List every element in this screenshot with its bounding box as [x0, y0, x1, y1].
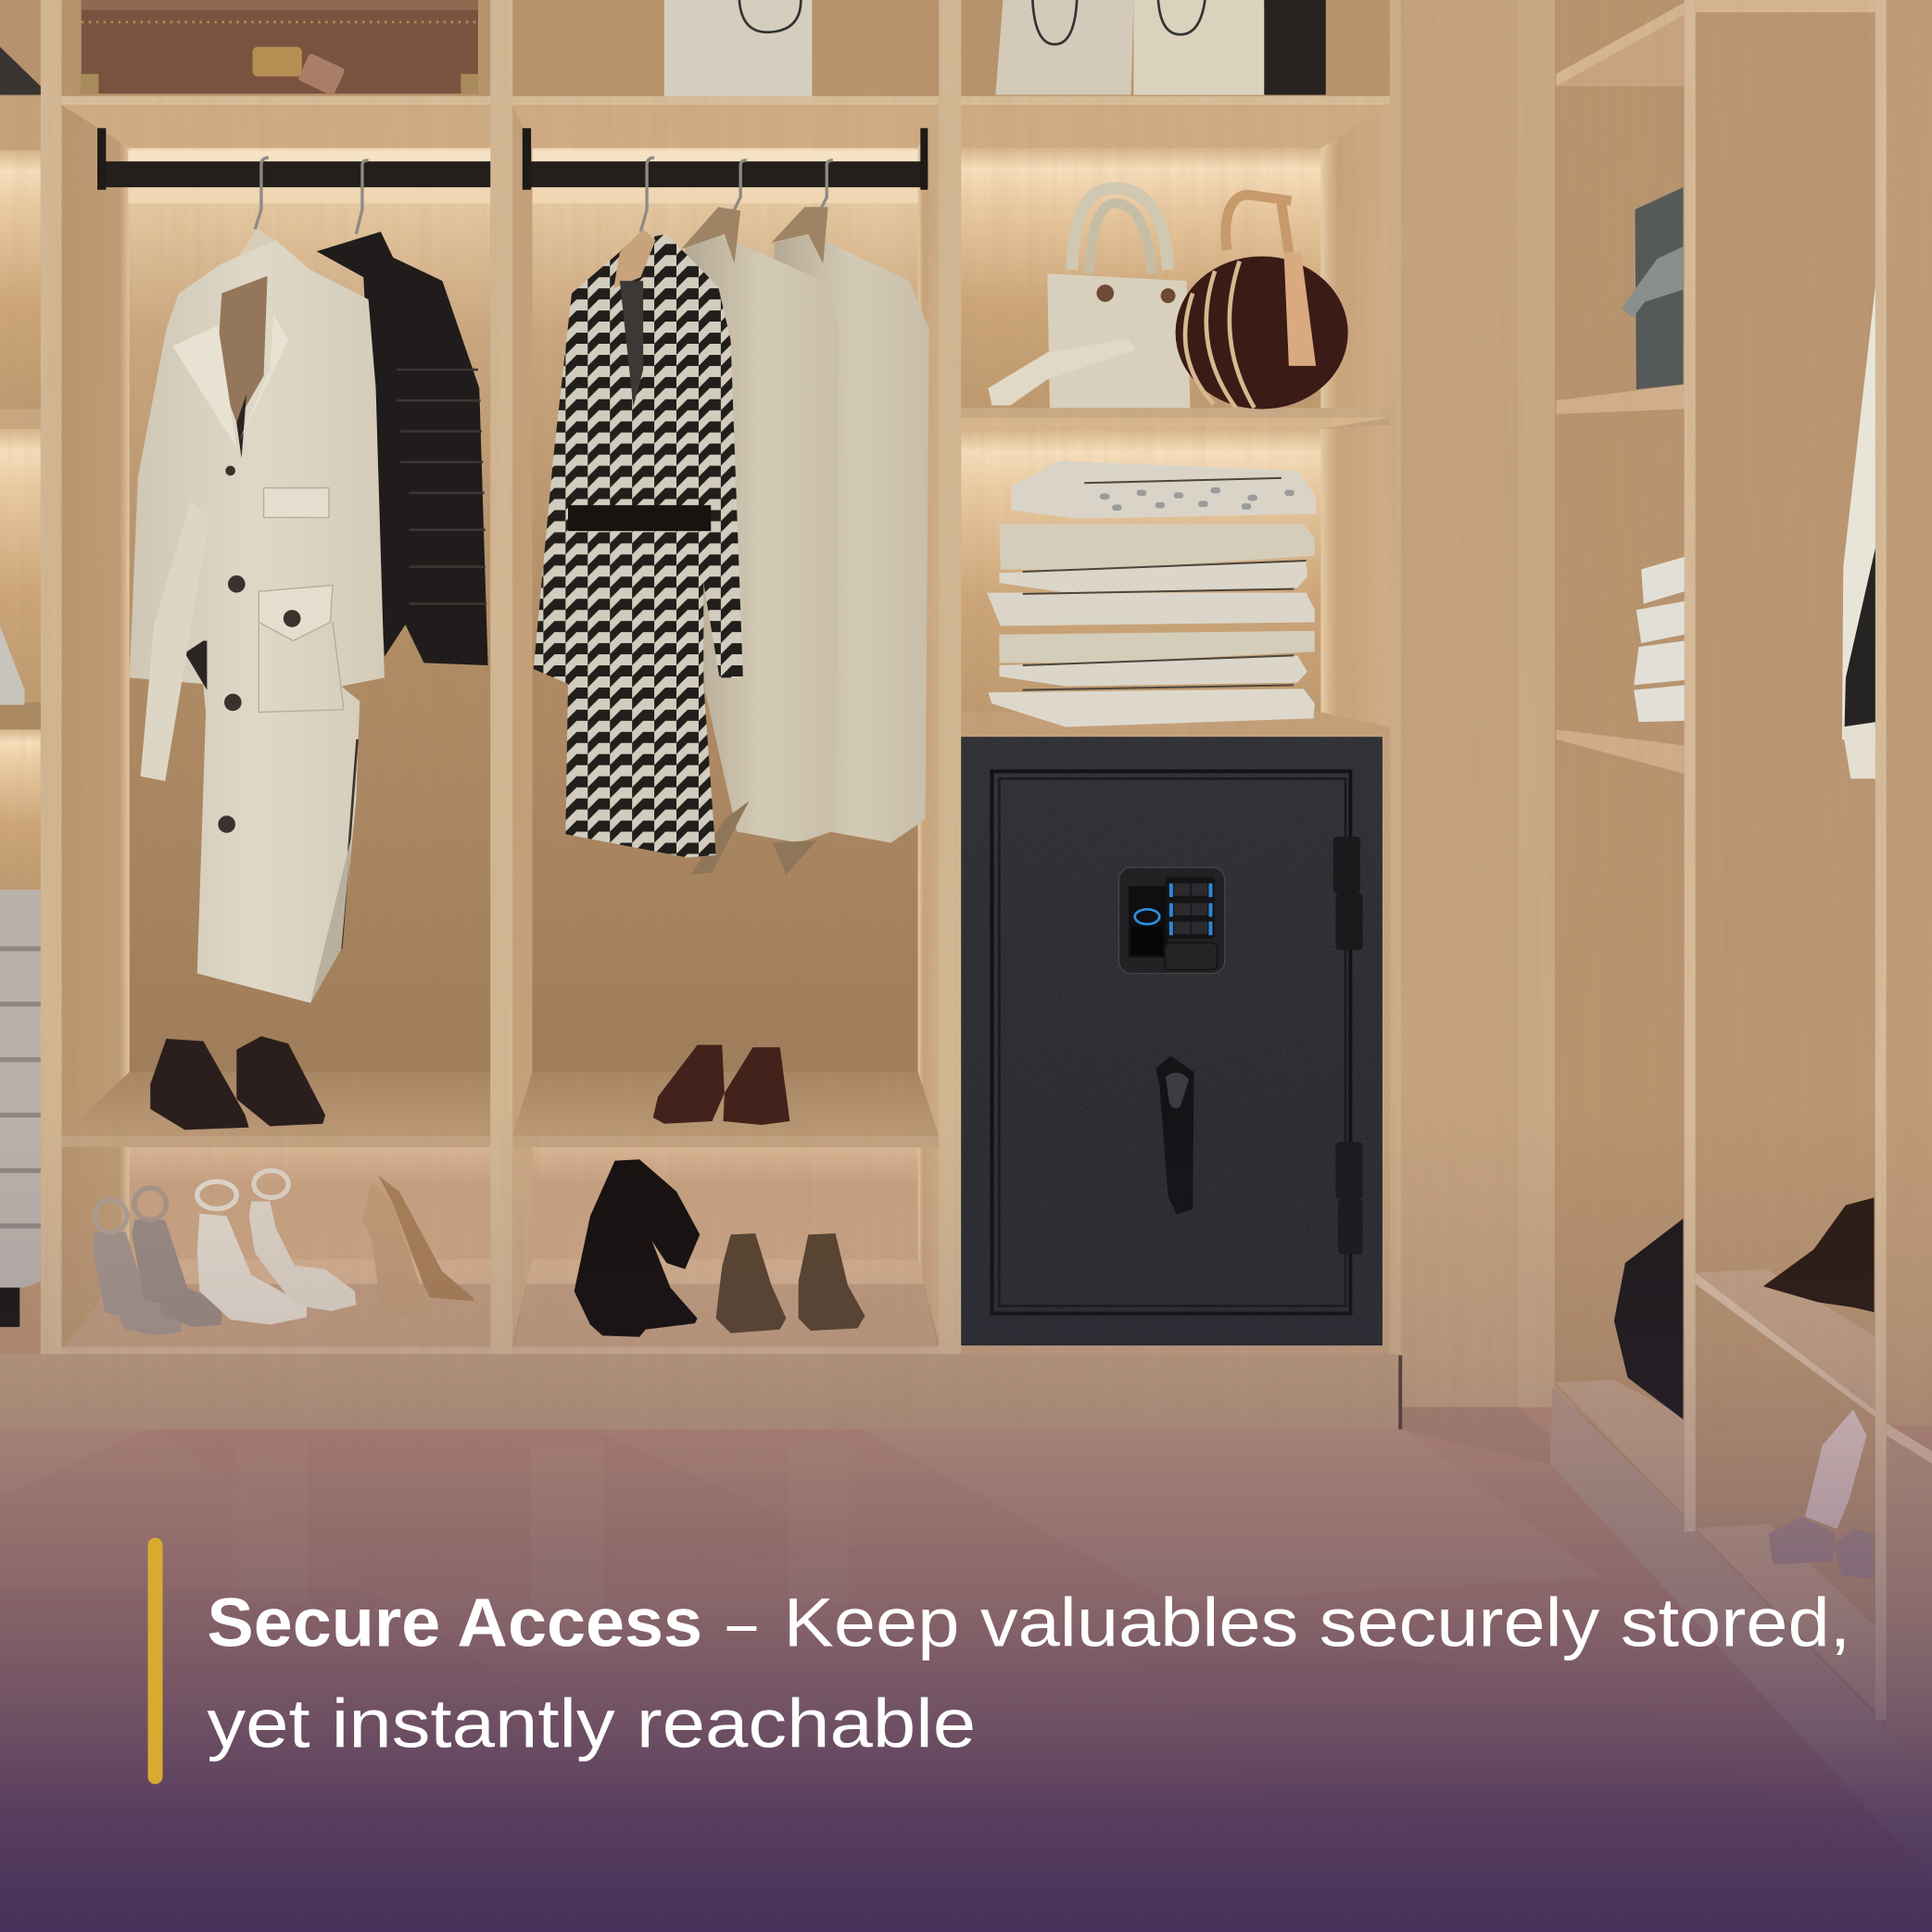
column 2 interior: [512, 0, 939, 1356]
accent bar: [148, 1537, 163, 1784]
shopping bags: [664, 0, 1326, 96]
bottom gradient overlay: [0, 1109, 1932, 1932]
handbag: round brown: [1176, 195, 1348, 409]
keypad lock: [1118, 867, 1225, 973]
safe body: [961, 737, 1383, 1345]
column 1 interior: [61, 0, 490, 1356]
houndstooth coat: [534, 229, 743, 857]
top compartments: [61, 0, 490, 96]
clothes rails: [97, 128, 928, 234]
top shelf items: [0, 0, 1326, 96]
white stack: [1634, 557, 1685, 722]
hanger and shirt: [221, 228, 283, 281]
heels row: [93, 1170, 474, 1335]
tan pumps: [378, 1176, 474, 1301]
handle: [1155, 1056, 1193, 1215]
taupe sandals: [93, 1232, 181, 1335]
column 3 interior: [961, 148, 1320, 409]
grey bag: [1635, 187, 1683, 389]
floor: [0, 1408, 1932, 1932]
caption text: [207, 1585, 1850, 1762]
far left column: [0, 0, 41, 1356]
icon: suitcase: [82, 0, 478, 96]
vertical posts: [41, 0, 61, 1356]
lower compartments: [130, 1146, 490, 1259]
handbag: white quilted: [988, 188, 1191, 408]
folded clothes stack: [987, 461, 1316, 727]
brown shoes: [716, 1233, 865, 1333]
caption text: Keep valuables securely stored,: [784, 1585, 1850, 1661]
hinges: [1333, 837, 1363, 1255]
right wardrobe unit: [1550, 0, 1932, 1879]
caption text: Secure Access: [207, 1585, 702, 1661]
black puffer jacket: [317, 232, 488, 665]
shoes on shelf: dark boots: [150, 1036, 325, 1130]
safe door frame: [991, 771, 1350, 1313]
right unit base: [1550, 1386, 1932, 1879]
wood grain texture: [0, 0, 1932, 1429]
plinth: [0, 1354, 1401, 1429]
pink heels: [1805, 1409, 1867, 1529]
black boots: [575, 1159, 700, 1337]
trench coat: [130, 228, 385, 1003]
caption text: yet instantly reachable: [207, 1686, 976, 1762]
shoes on shelf: brown loafers: [653, 1045, 789, 1125]
hanging garment: [1842, 285, 1875, 745]
right unit items: [1614, 187, 1875, 1578]
white sandals: [197, 1214, 307, 1324]
safe: [961, 737, 1383, 1345]
caption text: –: [727, 1585, 757, 1661]
wall panel: [1401, 0, 1518, 1408]
left wardrobe unit: [0, 0, 1402, 1429]
dark shoe: [1763, 1197, 1875, 1312]
luggage at left: [0, 625, 41, 1327]
black round bag: [1614, 1219, 1683, 1420]
garment bags: [681, 207, 929, 875]
shelves: [61, 1072, 490, 1136]
